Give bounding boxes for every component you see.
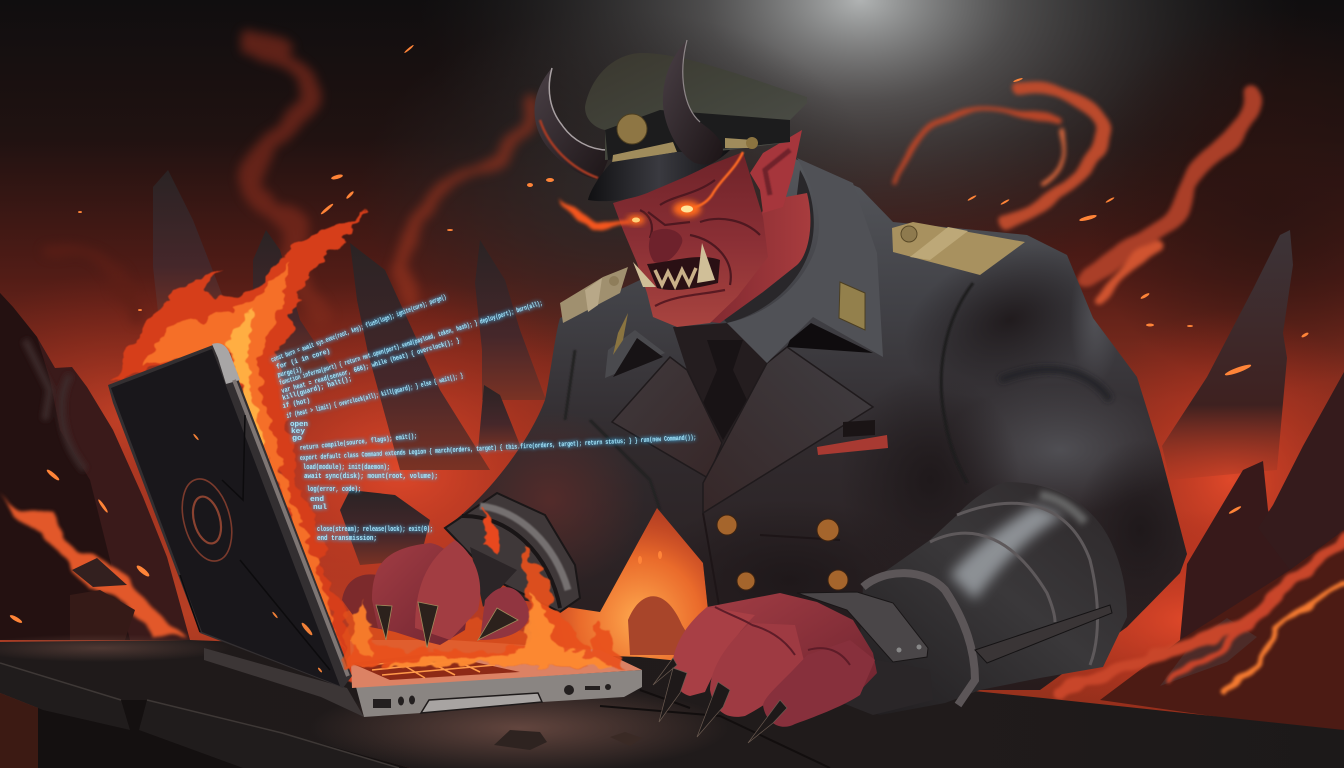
demon head bbox=[557, 130, 810, 327]
gold epaulette left bbox=[560, 267, 628, 323]
blue code streams bbox=[270, 294, 697, 543]
flame veins bbox=[687, 152, 743, 209]
left horn bbox=[534, 68, 612, 180]
blue code streams: kill(guard); halt(); bbox=[282, 375, 353, 403]
table dark understructure bbox=[0, 693, 43, 768]
face bbox=[613, 152, 768, 327]
laptop screen lid bbox=[108, 344, 352, 688]
blue code streams: function inferno(port) { return net.open(port).send(payload, token, hash); } deploy(port); burn(all); bbox=[279, 300, 544, 388]
nose bbox=[649, 229, 682, 263]
background hill behind coat gap bbox=[628, 596, 700, 655]
embers bbox=[9, 44, 1309, 624]
blue code streams: end transmission; bbox=[317, 535, 377, 543]
glowing keyboard bbox=[351, 653, 520, 680]
table slab edges bbox=[0, 663, 130, 730]
blue code streams: open bbox=[290, 421, 308, 429]
coat left lapel bbox=[612, 357, 722, 478]
blue code streams: key bbox=[291, 428, 306, 436]
lid embers bbox=[193, 433, 323, 673]
flames in front of hand bbox=[345, 508, 628, 668]
left hand claws bbox=[376, 602, 518, 648]
neck bbox=[690, 193, 810, 323]
coat shading bbox=[476, 258, 1187, 607]
cap badge bbox=[617, 114, 647, 144]
blue code streams: if (heat > limit) { overclock(all); kill(guard); } else { wait(); } bbox=[286, 372, 464, 421]
blue code streams: log(error, code); bbox=[307, 486, 361, 494]
wrist strap bbox=[797, 592, 928, 662]
laptop base bbox=[204, 648, 364, 717]
left armored cuff bbox=[445, 493, 580, 612]
blue code streams: close(stream); release(lock); exit(0); bbox=[317, 526, 433, 534]
right horn bbox=[663, 40, 723, 165]
rock spires left bbox=[153, 170, 546, 565]
table pebbles bbox=[494, 730, 642, 750]
left horn rim light bbox=[549, 68, 608, 150]
blue code streams: end bbox=[310, 496, 324, 504]
left horn underside glow bbox=[540, 120, 598, 178]
flame wisp bbox=[557, 197, 630, 231]
coat high collar right bbox=[727, 158, 883, 363]
coat neck lining bbox=[715, 170, 814, 323]
medal ribbon bbox=[817, 420, 888, 455]
smoke and flame swirls bbox=[55, 40, 1250, 320]
blue code streams: if (hot) bbox=[282, 397, 311, 411]
rocks right bbox=[1100, 230, 1344, 735]
gold band bbox=[612, 137, 758, 163]
cap crown bbox=[585, 53, 807, 160]
table top surface bbox=[0, 640, 1344, 768]
laptop ports bbox=[373, 684, 611, 713]
coat high collar left bbox=[605, 330, 665, 378]
left hand bbox=[342, 540, 530, 648]
blue code streams: nul bbox=[313, 504, 327, 512]
coat right lapel bbox=[703, 347, 873, 513]
small rock bbox=[72, 558, 127, 587]
demon body coat bbox=[445, 158, 1205, 690]
left collar pin bbox=[613, 313, 628, 355]
cap band bbox=[605, 110, 790, 160]
face wrinkles bbox=[640, 180, 760, 306]
rocks bottom left bbox=[0, 293, 190, 640]
blue code streams: const burn = await sys.exec(root, key); flush(logs); ignite(core); purge() bbox=[270, 294, 448, 365]
flames on keyboard behind hand bbox=[344, 590, 590, 668]
blue code streams: go bbox=[292, 435, 302, 443]
ear bbox=[750, 130, 802, 213]
blue code streams: load(module); init(daemon); bbox=[303, 464, 390, 472]
mouth and teeth bbox=[647, 257, 720, 290]
laptop bbox=[108, 343, 642, 717]
right horn rim light bbox=[683, 40, 700, 122]
lava streams bbox=[1060, 540, 1344, 692]
fangs bbox=[633, 243, 715, 287]
collar badge bbox=[839, 282, 865, 330]
blue code streams: for (i in core) bbox=[276, 348, 331, 372]
cap visor bbox=[588, 150, 730, 201]
gold epaulette right bbox=[892, 222, 1025, 275]
glowing eyes bbox=[627, 201, 701, 225]
blue code streams: var heat = read(sensor, 666); while (heat) { overclock(); } bbox=[281, 337, 461, 396]
shirt and tie bbox=[673, 323, 767, 443]
right hand claws bbox=[653, 658, 787, 743]
table bbox=[0, 634, 1344, 768]
right hand bbox=[653, 593, 877, 743]
gauntlet main shell bbox=[840, 482, 1127, 715]
officer cap bbox=[534, 40, 807, 201]
blue code streams: return compile(source, flags); emit(); bbox=[299, 433, 418, 453]
blue code streams: await sync(disk); mount(root, volume); bbox=[304, 473, 438, 481]
lava streak left bbox=[0, 493, 190, 640]
coat buttons bbox=[717, 515, 848, 590]
blue code streams: purge(i) bbox=[277, 367, 303, 380]
flames behind laptop lid bbox=[112, 210, 368, 682]
gauntlet inner sleeve bbox=[840, 660, 933, 715]
right armored gauntlet bbox=[797, 482, 1127, 715]
lid logo bbox=[174, 473, 240, 567]
blue code streams: export default class Command extends Legion { march(orders, target) { this.fire(orders, target); return status; } } run(new Command()); bbox=[300, 434, 697, 463]
gauntlet highlight bbox=[950, 505, 1065, 600]
